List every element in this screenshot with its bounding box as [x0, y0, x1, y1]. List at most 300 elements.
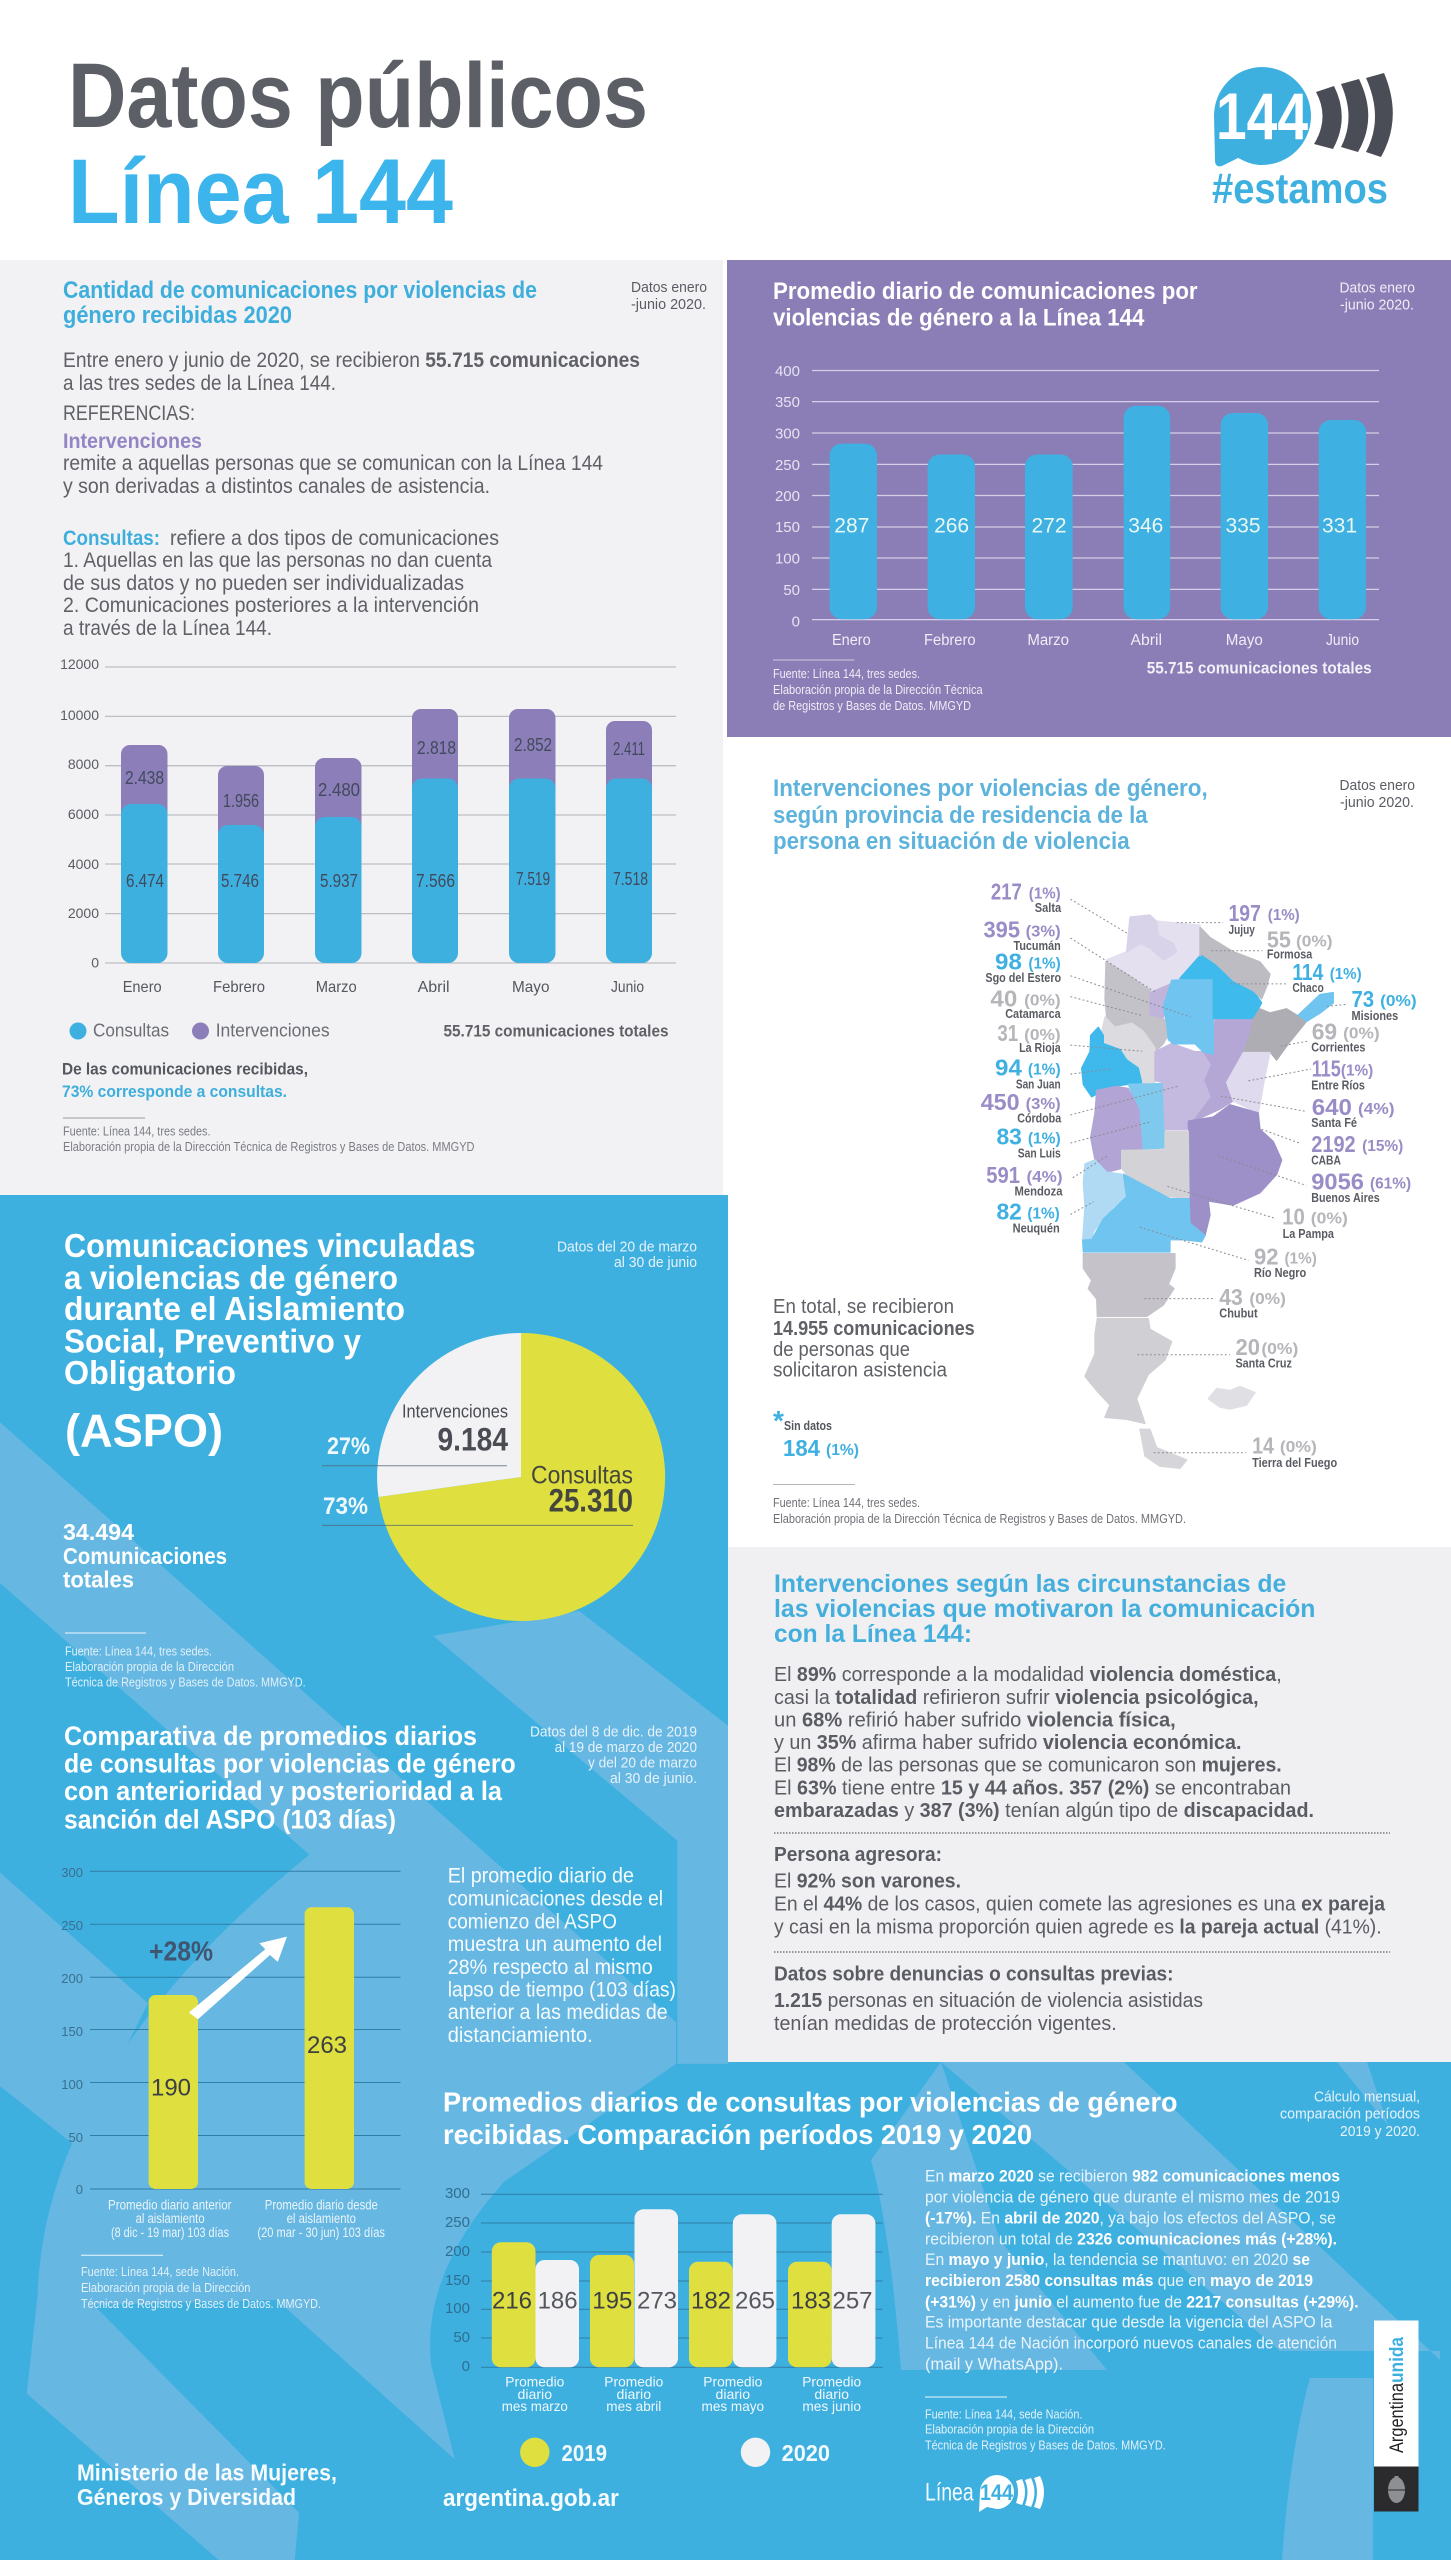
title: Datos públicos: [68, 45, 648, 147]
source note: Elaboración propia de la Dirección Técnica: [773, 682, 983, 697]
panel: ASPO: [63, 1227, 697, 1690]
label: Córdoba: Córdoba: [1017, 1111, 1061, 1126]
date note: 2019 y 2020.: [1340, 2123, 1420, 2140]
label: Tierra del Fuego: [1252, 1432, 1337, 1470]
date note: -junio 2020.: [1340, 296, 1414, 314]
label: Misiones: 73: [1351, 986, 1374, 1012]
bar chart: [775, 363, 1379, 649]
text block: references: 1. Aquellas en las que las personas no dan cuenta: [63, 549, 492, 572]
source note: Técnica de Registros y Bases de Datos. MMGYD.: [81, 2296, 321, 2311]
bar chart: 2019 vs 2020: 250: [445, 2214, 470, 2231]
callout: 73 percent: De las comunicaciones recibidas,: [62, 1060, 308, 1078]
bar chart: 266: [934, 514, 969, 538]
stacked bar chart: [60, 656, 676, 996]
text block: persona agresora: y casi en la misma proporción quien agrede es la pareja actual (41%).: [774, 1916, 1382, 1938]
logo: Línea 144: 144: [980, 2480, 1014, 2505]
bar chart: 2019 vs 2020: 0: [462, 2358, 470, 2375]
label: Tucumán: [984, 916, 1061, 953]
date note: [1340, 280, 1415, 314]
callout: sin datos: *: [773, 1405, 784, 1436]
panel: promedio diario: [727, 260, 1451, 737]
chart legend: Consultas: [93, 1020, 169, 1040]
label: Santa Cruz: Santa Cruz: [1235, 1356, 1292, 1371]
source note: Técnica de Registros y Bases de Datos. MMGYD.: [65, 1676, 306, 1690]
stacked bar chart: 1.956: [223, 791, 259, 811]
label: San Luis: (1%): [1028, 1130, 1061, 1148]
bar chart: before and after ASPO: 150: [61, 2024, 83, 2039]
bar chart: 2019 vs 2020: mes junio: [802, 2398, 861, 2414]
total communications: [63, 1519, 227, 1592]
label: La Rioja: 31: [997, 1020, 1018, 1046]
heading: provincia: persona en situación de violencia: [773, 828, 1130, 855]
label: Santiago del Estero: (1%): [1028, 955, 1061, 973]
date note: [1280, 2088, 1420, 2140]
heading: circunstancias: Intervenciones según las circunstancias de: [774, 1570, 1286, 1598]
label: Neuquén: 82: [996, 1199, 1022, 1225]
heading: comparativa: [64, 1721, 516, 1834]
panel: circunstancias: [728, 1547, 1451, 2062]
bar chart: before and after ASPO: 250: [61, 1918, 83, 1933]
source note: [65, 1644, 306, 1690]
date note: [557, 1238, 697, 1271]
date note: Datos enero: [631, 279, 707, 296]
callout: +28%: +28%: [149, 1936, 213, 1966]
label: Chaco: (1%): [1330, 965, 1362, 983]
stacked bar chart: 7.518: [613, 869, 648, 889]
bar chart: 150: [775, 519, 800, 536]
source note: [773, 666, 983, 713]
date note: Cálculo mensual,: [1314, 2088, 1420, 2106]
text block: aumento: distanciamiento.: [448, 2024, 593, 2047]
heading: ASPO: Social, Preventivo y: [64, 1322, 362, 1360]
label: Formosa: [1267, 927, 1333, 962]
text block: total: [773, 1296, 975, 1382]
bar chart: 2019 vs 2020: 200: [445, 2243, 470, 2260]
footer: ministerio: Ministerio de las Mujeres,: [77, 2460, 337, 2486]
label: Mendoza: (4%): [1026, 1168, 1063, 1186]
date note: Datos enero: [1340, 777, 1415, 794]
source note: Fuente: Línea 144, sede Nación.: [81, 2264, 239, 2279]
pie chart: [322, 1333, 665, 1621]
bar chart: 2019 vs 2020: mes abril: [606, 2398, 661, 2414]
bar chart: 2019 vs 2020: 183: [791, 2288, 831, 2314]
text block: modalidades: [774, 1664, 1314, 1822]
text block: analysis: recibieron un total de 2326 comunicaciones más (+28%).: [925, 2230, 1337, 2248]
label: La Rioja: (0%): [1024, 1026, 1061, 1044]
stacked bar chart: Febrero: [213, 979, 265, 996]
panel: cantidad de comunicaciones: [0, 260, 723, 1195]
text block: analysis: En marzo 2020 se recibieron 982 comunicaciones menos: [925, 2166, 1340, 2186]
bar chart: 2019 vs 2020: mes marzo: [502, 2398, 568, 2414]
text block: analysis: Es importante destacar que desde la vigencia del ASPO la: [925, 2312, 1333, 2332]
heading: promedio diario: [773, 278, 1198, 332]
heading: promedio diario: violencias de género a la Línea 144: [773, 304, 1145, 332]
label: Misiones: [1351, 986, 1417, 1023]
label: Chaco: [1292, 959, 1362, 995]
text block: persona agresora: [774, 1844, 1386, 1938]
text block: aumento: comienzo del ASPO: [448, 1910, 617, 1934]
text block: analysis: (+31%) y en junio el aumento fue de 2217 consultas (+29%).: [925, 2292, 1359, 2312]
label: Santiago del Estero: Sgo del Estero: [985, 970, 1061, 985]
heading: provincia: según provincia de residencia de la: [773, 802, 1148, 829]
source note: Fuente: Línea 144, tres sedes.: [773, 1495, 920, 1510]
source note: Elaboración propia de la Dirección Técnica de Registros y Bases de Datos. MMGYD: [63, 1140, 474, 1154]
bar chart: 2019 vs 2020: 300: [445, 2185, 470, 2202]
source note: [925, 2408, 1166, 2452]
heading: cantidad: Cantidad de comunicaciones por violencias de: [63, 277, 537, 304]
heading: comparativa: Comparativa de promedios diarios: [64, 1721, 477, 1751]
bar chart: 2019 vs 2020: Promedio: [604, 2374, 664, 2390]
text block: references: [63, 349, 640, 640]
bar chart: 2019 vs 2020: 257: [832, 2288, 873, 2314]
province labels: [981, 879, 1417, 1470]
text block: references: Entre enero y junio de 2020, se recibieron 55.715 comunicaciones: [63, 349, 640, 372]
label: Salta: Salta: [1035, 900, 1061, 915]
stacked bar chart: 7.519: [516, 869, 550, 889]
total communications: totales: [63, 1566, 134, 1592]
text block: modalidades: casi la totalidad refirieron sufrir violencia psicológica,: [774, 1687, 1259, 1709]
source note: Fuente: Línea 144, sede Nación.: [925, 2408, 1082, 2422]
footer: ministerio: Géneros y Diversidad: [77, 2484, 296, 2510]
text block: aumento: muestra un aumento del: [448, 1933, 662, 1956]
bar chart: 346: [1128, 514, 1163, 538]
text block: denuncias previas: 1.215 personas en situación de violencia asistidas: [774, 1990, 1203, 2012]
label: CABA: (15%): [1362, 1138, 1403, 1155]
label: Tierra del Fuego: (0%): [1280, 1439, 1317, 1456]
legend: years: 2020: [782, 2440, 830, 2466]
bar chart: 272: [1031, 514, 1067, 538]
stacked bar chart: 2.411: [613, 739, 645, 759]
text block: aumento: El promedio diario de: [448, 1864, 634, 1888]
pie chart: 9.184: [438, 1422, 508, 1458]
label: Corrientes: 69: [1312, 1019, 1337, 1045]
bar chart: Enero: [832, 632, 871, 649]
bar chart: 2019 vs 2020: 50: [453, 2329, 470, 2346]
text block: modalidades: embarazadas y 387 (3%) tenían algún tipo de discapacidad.: [774, 1800, 1314, 1822]
bar chart: before and after ASPO: 190: [151, 2074, 191, 2102]
legend: years: 2019: [562, 2440, 607, 2466]
footer: website: argentina.gob.ar: [443, 2485, 619, 2512]
bar chart: before and after ASPO: 263: [307, 2032, 347, 2059]
label: San Luis: San Luis: [1018, 1146, 1061, 1160]
label: Misiones: Misiones: [1351, 1009, 1398, 1023]
bar chart: 0: [792, 614, 800, 630]
stacked bar chart: 6.474: [126, 871, 164, 891]
label: Catamarca: Catamarca: [1005, 1007, 1061, 1021]
text block: references: de sus datos y no pueden ser individualizadas: [63, 572, 464, 595]
label: Jujuy: Jujuy: [1229, 922, 1255, 937]
heading: comparativa: de consultas por violencias de género: [64, 1748, 516, 1778]
stacked bar chart: Enero: [123, 979, 162, 996]
label: Chaco: Chaco: [1292, 981, 1324, 995]
label: San Juan: San Juan: [1016, 1077, 1061, 1092]
title: [68, 45, 648, 243]
bar chart: 2019 vs 2020: diario: [814, 2386, 849, 2402]
label: Neuquén: (1%): [1027, 1205, 1060, 1223]
stacked bar chart: 0: [91, 954, 99, 970]
date note: comparación períodos: [1280, 2106, 1420, 2122]
label: San Juan: 94: [995, 1055, 1023, 1081]
text block: total: En total, se recibieron: [773, 1296, 954, 1318]
label: Río Negro: 92: [1254, 1244, 1278, 1270]
stacked bar chart: Mayo: [512, 979, 550, 996]
legend: years: [520, 2438, 830, 2467]
label: Corrientes: Corrientes: [1311, 1040, 1366, 1055]
text block: references: Consultas:: [63, 527, 160, 550]
stacked bar chart: 2.480: [318, 780, 360, 800]
bar chart: before and after ASPO: (20 mar - 30 jun) 103 días: [257, 2225, 385, 2240]
source note: Elaboración propia de la Dirección: [65, 1660, 234, 1674]
heading: provincia: [773, 775, 1208, 855]
bar chart: 2019 vs 2020: 150: [445, 2272, 470, 2289]
label: San Luis: [996, 1124, 1061, 1160]
label: Tierra del Fuego: 14: [1252, 1432, 1275, 1458]
text block: aumento: comunicaciones desde el: [448, 1888, 663, 1910]
blue background with pattern: [0, 1195, 1451, 2560]
bar chart: 2019 vs 2020: 195: [592, 2288, 632, 2314]
text block: analysis: En mayo y junio, la tendencia se mantuvo: en 2020 se: [925, 2250, 1310, 2269]
bar chart: 2019 vs 2020: 265: [735, 2288, 775, 2314]
label: Neuquén: Neuquén: [1013, 1221, 1060, 1235]
label: Santa Cruz: (0%): [1261, 1340, 1298, 1358]
text block: analysis: Línea 144 de Nación incorporó nuevos canales de atención: [925, 2334, 1337, 2352]
date note: y del 20 de marzo: [588, 1754, 697, 1772]
label: Neuquén: [996, 1199, 1060, 1235]
heading: circunstancias: [774, 1570, 1316, 1648]
callout: sin datos: Sin datos: [784, 1418, 832, 1433]
label: Santa Fé: (4%): [1358, 1100, 1394, 1118]
map of Argentina: [1082, 915, 1333, 1468]
label: Chaco: 114: [1292, 959, 1324, 985]
label: Corrientes: (0%): [1343, 1025, 1380, 1043]
label: Entre Ríos: (1%): [1341, 1062, 1373, 1080]
heading: comparativa: sanción del ASPO (103 días): [64, 1804, 396, 1834]
bar chart: 2019 vs 2020: Promedio: [802, 2374, 861, 2390]
heading: cantidad: género recibidas 2020: [63, 302, 292, 329]
source note: Fuente: Línea 144, tres sedes.: [773, 666, 920, 681]
heading: circunstancias: las violencias que motivaron la comunicación: [774, 1595, 1316, 1623]
label: Buenos Aires: (61%): [1370, 1175, 1411, 1193]
label: Mendoza: 591: [986, 1162, 1020, 1188]
arrow: increase: [189, 1937, 287, 2019]
label: Chubut: Chubut: [1219, 1306, 1258, 1321]
text block: modalidades: El 89% corresponde a la modalidad violencia doméstica,: [774, 1664, 1282, 1686]
date note: [530, 1724, 697, 1787]
date note: [631, 279, 707, 313]
total label: 55.715 comunicaciones totales: [444, 1022, 668, 1040]
stacked bar chart: Marzo: [316, 979, 357, 996]
heading: ASPO: [64, 1227, 476, 1456]
footer: ministerio: [77, 2460, 337, 2510]
text block: references: a las tres sedes de la Línea 144.: [63, 372, 336, 395]
total label: 55.715 comunicaciones totales: [1147, 658, 1372, 678]
label: La Rioja: La Rioja: [1019, 1041, 1061, 1055]
pie chart: 27%: [327, 1433, 370, 1460]
label: Mendoza: [986, 1162, 1063, 1199]
text block: references: a través de la Línea 144.: [63, 617, 272, 640]
text block: total: solicitaron asistencia: [773, 1360, 948, 1382]
bar chart: 350: [775, 394, 800, 411]
pie chart: Intervenciones: [402, 1400, 508, 1422]
bar chart: 287: [834, 514, 869, 538]
label: La Pampa: 10: [1282, 1204, 1305, 1230]
date note: Datos del 8 de dic. de 2019: [530, 1724, 697, 1740]
bar chart: before and after ASPO: 0: [76, 2182, 83, 2197]
label: Misiones: (0%): [1380, 992, 1417, 1010]
text block: modalidades: y un 35% afirma haber sufrido violencia económica.: [774, 1732, 1242, 1754]
label: Santa Fé: [1311, 1094, 1394, 1130]
label: Santa Fé: 640: [1312, 1094, 1352, 1120]
bar chart: Abril: [1130, 632, 1162, 649]
label: Jujuy: [1229, 900, 1300, 937]
source note: [81, 2264, 321, 2311]
title: Línea 144: [68, 141, 453, 243]
stacked bar chart: 2.818: [417, 738, 456, 758]
logo: 144 estamos: 144: [1216, 79, 1308, 153]
bar chart: 2019 vs 2020: mes mayo: [702, 2398, 764, 2414]
stacked bar chart: 2.438: [125, 768, 164, 788]
text block: modalidades: un 68% refirió haber sufrido violencia física,: [774, 1710, 1176, 1732]
label: Buenos Aires: [1311, 1169, 1411, 1205]
heading: circunstancias: con la Línea 144:: [774, 1620, 972, 1648]
heading: cantidad: [63, 277, 537, 329]
icon: national emblem: [1388, 2476, 1405, 2503]
source note: Fuente: Línea 144, tres sedes.: [63, 1124, 210, 1138]
bar chart: 2019 vs 2020: 216: [492, 2288, 532, 2314]
source note: Elaboración propia de la Dirección: [81, 2280, 250, 2295]
label: Tucumán: Tucumán: [1014, 939, 1061, 953]
label: Córdoba: (3%): [1026, 1095, 1061, 1113]
bar chart: 300: [775, 426, 800, 442]
text block: denuncias previas: Datos sobre denuncias o consultas previas:: [774, 1964, 1174, 1986]
bar chart: Febrero: [924, 632, 976, 649]
bar chart: 200: [775, 488, 800, 505]
date note: -junio 2020.: [1340, 794, 1414, 811]
text block: total: de personas que: [773, 1339, 910, 1361]
label: La Pampa: [1282, 1204, 1348, 1241]
date note: Datos del 20 de marzo: [557, 1238, 697, 1256]
text block: aumento: 28% respecto al mismo: [448, 1956, 653, 1979]
label: Córdoba: [981, 1089, 1061, 1126]
stacked bar chart: 5.937: [320, 871, 358, 891]
panel: comparativa promedios: [61, 1721, 697, 2311]
bar chart: 2019 vs 2020: 273: [637, 2288, 677, 2314]
label: Chubut: [1219, 1284, 1286, 1321]
date note: al 19 de marzo de 2020: [555, 1739, 697, 1756]
stacked bar chart: 4000: [68, 856, 99, 872]
label: Salta: [991, 879, 1061, 915]
label: Salta: 217: [991, 879, 1022, 905]
label: La Rioja: [997, 1020, 1061, 1055]
bar chart: 2019 vs 2020: Promedio: [505, 2374, 565, 2390]
text block: analysis: recibieron 2580 consultas más que en mayo de 2019: [925, 2271, 1313, 2290]
heading: ASPO: (ASPO): [65, 1404, 223, 1456]
stacked bar chart: 2.852: [514, 735, 552, 755]
badge: Argentina unida: Argentina: [1387, 2383, 1408, 2453]
badge: Argentina unida: [1374, 2320, 1418, 2512]
text block: analysis: [925, 2166, 1359, 2374]
stacked bar chart: 2000: [68, 905, 99, 921]
label: Río Negro: Río Negro: [1254, 1266, 1306, 1280]
text block: references: refiere a dos tipos de comunicaciones: [170, 527, 499, 550]
bar chart: Mayo: [1226, 632, 1263, 649]
source note: Técnica de Registros y Bases de Datos. MMGYD.: [925, 2438, 1166, 2452]
label: Chubut: (0%): [1249, 1290, 1286, 1308]
stacked bar chart: 8000: [68, 756, 99, 772]
pie chart: Consultas: [531, 1462, 633, 1490]
bar chart: Junio: [1326, 632, 1359, 649]
stacked bar chart: Abril: [418, 979, 450, 996]
stacked bar chart: 12000: [60, 656, 99, 672]
text block: persona agresora: En el 44% de los casos, quien comete las agresiones es una ex pareja: [774, 1894, 1386, 1916]
source note: [63, 1124, 474, 1154]
text block: references: REFERENCIAS:: [63, 402, 195, 425]
badge: Argentina unida: unida: [1387, 2337, 1408, 2383]
logo: 144 estamos: [1212, 67, 1393, 213]
stacked bar chart: 5.746: [221, 871, 259, 891]
text block: persona agresora: El 92% son varones.: [774, 1870, 961, 1892]
label: Salta: (1%): [1029, 885, 1061, 903]
bar chart: 2019 vs 2020: 186: [538, 2288, 578, 2314]
bar chart: 50: [783, 582, 800, 599]
text block: analysis: (-17%). En abril de 2020, ya bajo los efectos del ASPO, se: [925, 2208, 1336, 2228]
logo: Línea 144: Línea: [925, 2478, 974, 2506]
bar chart: 2019 vs 2020: 182: [691, 2288, 731, 2314]
label: Catamarca: 40: [990, 985, 1017, 1012]
bar chart: 2019 vs 2020: [445, 2185, 883, 2414]
label: Río Negro: (1%): [1284, 1250, 1317, 1268]
source note: Elaboración propia de la Dirección: [925, 2422, 1094, 2436]
bar chart: before and after ASPO: [61, 1865, 400, 2240]
date note: [1340, 777, 1415, 811]
bar chart: 2019 vs 2020: diario: [518, 2386, 552, 2402]
source note: [773, 1495, 1186, 1526]
label: Buenos Aires: 9056: [1311, 1169, 1364, 1195]
logo: Línea 144: [925, 2475, 1044, 2512]
source note: Fuente: Línea 144, tres sedes.: [65, 1644, 212, 1658]
bar chart: before and after ASPO: 100: [61, 2077, 83, 2092]
callout: sin datos: (1%): [826, 1442, 859, 1459]
text block: aumento: anterior a las medidas de: [448, 2001, 668, 2024]
label: Tierra del Fuego: Tierra del Fuego: [1252, 1456, 1337, 1470]
label: CABA: CABA: [1311, 1153, 1341, 1168]
date note: al 30 de junio.: [610, 1770, 697, 1787]
text block: analysis: por violencia de género que durante el mismo mes de 2019: [925, 2188, 1340, 2206]
panel: comparación 2019 2020: [443, 2086, 1420, 2467]
text block: total: 14.955 comunicaciones: [773, 1318, 975, 1340]
heading: ASPO: a violencias de género: [64, 1259, 398, 1296]
text block: analysis: (mail y WhatsApp).: [925, 2354, 1063, 2374]
heading: ASPO: Comunicaciones vinculadas: [64, 1227, 476, 1264]
label: Jujuy: 197: [1229, 900, 1261, 926]
label: Catamarca: (0%): [1024, 992, 1061, 1009]
heading: provincia: Intervenciones por violencias de género,: [773, 775, 1208, 802]
bar chart: 100: [775, 550, 800, 568]
label: Chubut: 43: [1219, 1284, 1243, 1310]
label: La Pampa: (0%): [1311, 1210, 1348, 1228]
pie chart: 73%: [323, 1493, 368, 1520]
chart legend: [70, 1020, 330, 1040]
bar chart: before and after ASPO: 200: [61, 1971, 83, 1986]
label: Santiago del Estero: 98: [995, 949, 1022, 975]
heading: comparación: [443, 2086, 1178, 2150]
callout: 73 percent: 73% corresponde a consultas.: [62, 1082, 287, 1101]
bar chart: before and after ASPO: el aislamiento: [287, 2211, 356, 2226]
bar chart: before and after ASPO: Promedio diario anterior: [108, 2198, 232, 2212]
label: La Pampa: La Pampa: [1283, 1226, 1334, 1241]
chart legend: Intervenciones: [216, 1020, 330, 1040]
stacked bar chart: 10000: [60, 707, 99, 723]
